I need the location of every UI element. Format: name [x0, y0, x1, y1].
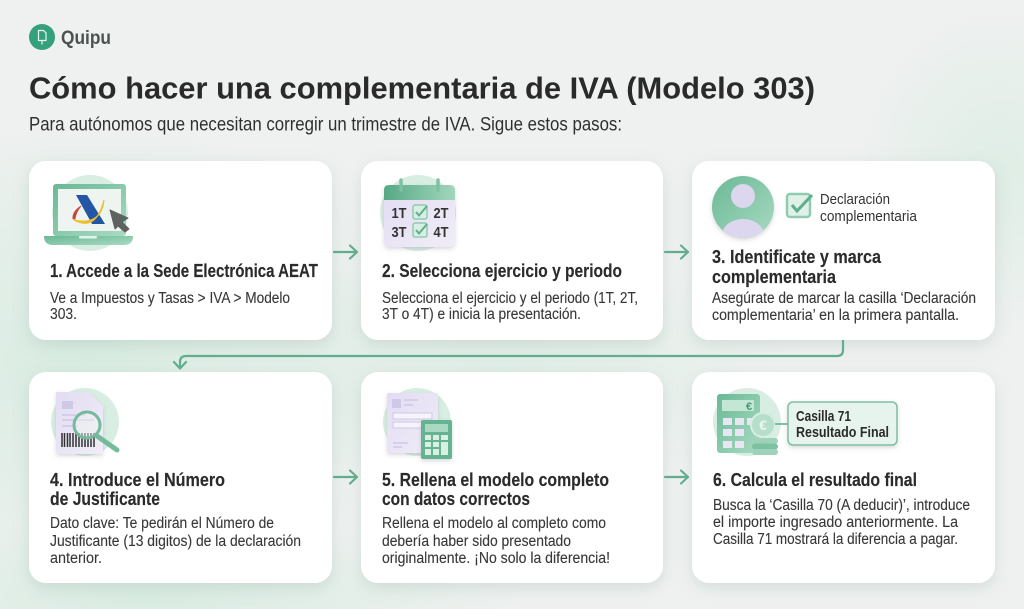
step 5 text: originalmente. ¡No solo la diferencia!: [382, 550, 610, 567]
step 4 heading: [50, 469, 225, 509]
icon: calculator and euro coins: €: [746, 401, 752, 413]
step 1 heading: 1. Accede a la Sede Electrónica AEAT: [50, 260, 319, 281]
step 2 text: [382, 290, 638, 323]
callout: Casilla 71: Resultado Final: [796, 424, 889, 441]
step 5 text: Rellena el modelo al completo como: [382, 515, 606, 532]
icon: calculator and euro coins: €: [759, 417, 767, 433]
step 6 heading: 6. Calcula el resultado final: [713, 469, 917, 490]
step 4 text: anterior.: [50, 550, 102, 567]
icon: checkbox: [787, 194, 812, 217]
icon: form and calculator: [383, 388, 452, 459]
step 2 text: 3T o 4T) e inicia la presentación.: [382, 306, 581, 323]
icon: calendar with quarters: 2T: [434, 205, 448, 222]
logo: Quipu: Quipu: [61, 28, 111, 49]
step 3 heading: 3. Identificate y marca: [712, 246, 882, 267]
title: Cómo hacer una complementaria de IVA (Modelo 303): [29, 70, 815, 106]
checkbox label: Declaración: [820, 191, 890, 208]
arrow: step 2 to 3: [665, 246, 688, 258]
icon: user avatar: [712, 176, 774, 251]
step 6 text: Casilla 71 mostrará la diferencia a pagar.: [713, 531, 958, 548]
step 4 text: Dato clave: Te pedirán el Número de: [50, 515, 274, 532]
checkbox label: complementaria: [820, 208, 918, 225]
arrow: step 1 to 2: [334, 246, 357, 258]
step 3 heading: [712, 246, 882, 287]
icon: document with barcode and magnifier: [51, 388, 119, 456]
step 1 text: 303.: [50, 306, 77, 323]
icon: calendar with quarters: 3T: [392, 224, 406, 241]
step 2 heading: 2. Selecciona ejercicio y periodo: [382, 260, 622, 281]
step 6 text: [713, 497, 970, 548]
arrow: step 5 to 6: [665, 470, 688, 484]
panel: step 2: [361, 161, 663, 340]
step 1 text: Ve a Impuestos y Tasas > IVA > Modelo: [50, 290, 290, 307]
step 5 heading: [382, 469, 609, 509]
subtitle: Para autónomos que necesitan corregir un trimestre de IVA. Sigue estos pasos:: [29, 114, 622, 136]
icon: calendar with quarters: 1T: [392, 205, 406, 222]
callout: Casilla 71: [788, 402, 897, 445]
callout: Casilla 71: Casilla 71: [796, 408, 851, 425]
panel: step 5: [361, 372, 663, 583]
step 5 text: debería haber sido presentado: [382, 533, 571, 550]
icon: calculator and euro coins: [713, 388, 788, 456]
icon: calendar with quarters: 4T: [434, 224, 448, 241]
arrow: step 4 to 5: [334, 470, 357, 484]
step 4 heading: 4. Introduce el Número: [50, 469, 225, 490]
arrow: step 3 to 4 connector: [174, 340, 843, 368]
logo: Quipu: [29, 24, 111, 50]
step 2 text: Selecciona el ejercicio y el periodo (1T, 2T,: [382, 290, 638, 307]
step 4 heading: de Justificante: [50, 488, 160, 509]
panel: step 1: [29, 161, 332, 340]
step 1 text: [50, 290, 290, 323]
panel: step 4: [29, 372, 332, 583]
step 3 text: [712, 290, 976, 324]
icon: calendar with quarters: [380, 175, 456, 251]
step 3 text: complementaria’ en la primera pantalla.: [712, 307, 959, 324]
panel: step 3: [692, 161, 995, 340]
step 3 text: Asegúrate de marcar la casilla ‘Declaración: [712, 290, 976, 307]
step 4 text: [50, 515, 301, 567]
step 4 text: Justificante (13 digitos) de la declaración: [50, 533, 301, 550]
step 5 heading: con datos correctos: [382, 488, 530, 509]
step 5 text: [382, 515, 610, 567]
step 6 text: Busca la ‘Casilla 70 (A deducir)’, introduce: [713, 497, 970, 514]
step 5 heading: 5. Rellena el modelo completo: [382, 469, 609, 490]
step 3 heading: complementaria: [712, 266, 837, 287]
icon: laptop with AEAT logo: [44, 175, 133, 251]
checkbox label: [820, 191, 918, 225]
step 6 text: el importe ingresado anteriormente. La: [713, 514, 958, 531]
panel: step 6: [692, 372, 995, 583]
